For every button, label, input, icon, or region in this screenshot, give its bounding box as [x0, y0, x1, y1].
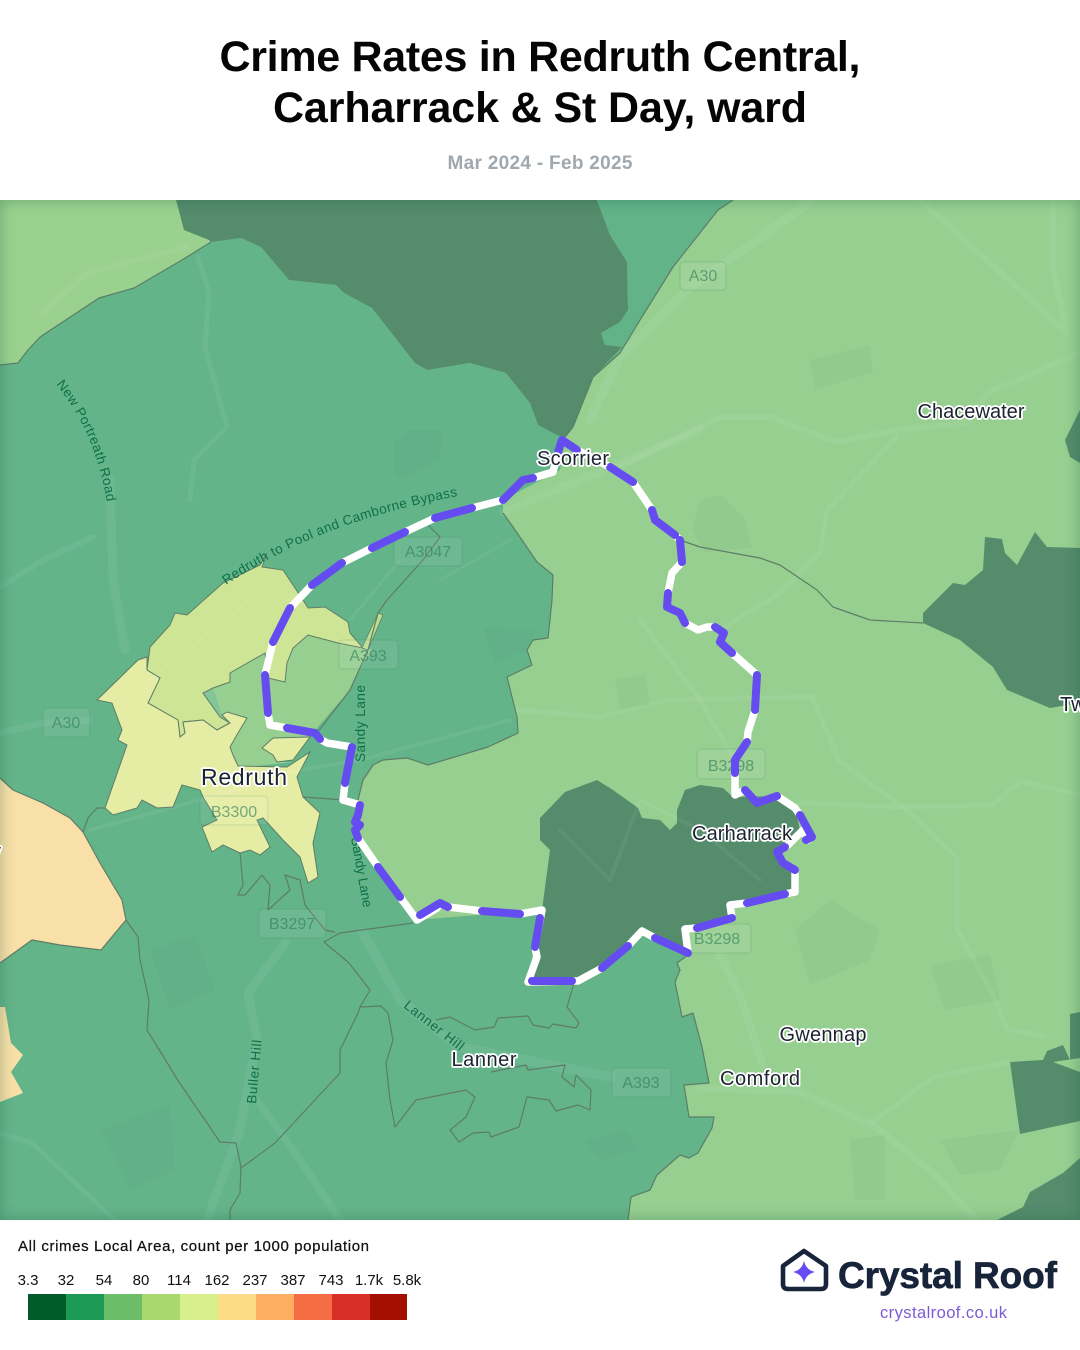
road label A30 north: [680, 262, 726, 290]
region: north-west light area: [0, 200, 211, 365]
region: Carharrack dark area: [528, 780, 800, 982]
legend values: 1.7k: [355, 1272, 384, 1289]
legend values: 3.3: [18, 1272, 38, 1289]
road label A393 south: [612, 1068, 671, 1097]
road label B3298 south: B3298: [694, 931, 740, 948]
road label B3300: B3300: [211, 804, 257, 821]
region: Redruth light green: [203, 635, 373, 768]
region: Redruth sliver: [204, 688, 226, 720]
road label A393 south: A393: [622, 1075, 660, 1092]
street labels: Sandy Lane: [348, 836, 375, 908]
region: west and south mid-green area: [0, 238, 714, 1220]
title: Carharrack & St Day, ward: [273, 84, 807, 132]
road label A30 north: A30: [689, 268, 717, 285]
street labels: New Portreath Road: [56, 380, 116, 501]
region: Redruth north yellow-green: [147, 553, 363, 737]
road label A393 west: [339, 640, 398, 669]
legend values: 162: [204, 1272, 230, 1289]
street labels: Buller Hill: [244, 1039, 265, 1104]
place label Comford: Comford: [720, 1068, 800, 1090]
place label Redruth: Redruth: [201, 764, 287, 790]
legend: [18, 1238, 422, 1320]
website url: crystalroof.co.uk: [880, 1304, 1008, 1322]
region: A393 sliver: [362, 613, 383, 650]
map panel: [0, 200, 1080, 1220]
road label B3300: [200, 796, 268, 825]
brand name: Crystal Roof: [838, 1255, 1058, 1296]
area boundaries: [0, 200, 923, 1220]
road label A393 west: A393: [349, 648, 387, 665]
road label B3297: [259, 909, 326, 938]
place label Scorrier: Scorrier: [537, 448, 609, 470]
region: Redruth yellow: [97, 657, 320, 883]
legend values: 54: [96, 1272, 112, 1289]
road label A3047: [394, 537, 462, 566]
legend values: [18, 1272, 422, 1289]
street labels: Sandy Lane: [353, 685, 368, 762]
place label Carharrack: Carharrack: [692, 823, 793, 845]
road label A30 west: A30: [52, 715, 80, 732]
local roads: [558, 426, 1012, 1124]
legend values: 743: [318, 1272, 344, 1289]
road label B3298 north: [697, 749, 765, 779]
vignette: [0, 194, 1080, 1226]
icon: house with star: [783, 1251, 826, 1289]
place label Chacewater: Chacewater: [918, 401, 1025, 423]
region: east dark patch: [923, 532, 1080, 708]
legend values: 80: [133, 1272, 149, 1289]
region: north dark area: [176, 200, 628, 437]
region: south-west peach area: [0, 778, 126, 963]
title: Crime Rates in Redruth Central,: [220, 33, 860, 81]
road label B3298 north: B3298: [708, 758, 754, 775]
road label B3298 south: [683, 924, 751, 953]
road label A3047: A3047: [405, 544, 451, 561]
legend colour scale: [28, 1294, 407, 1320]
legend values: 32: [58, 1272, 74, 1289]
logo: [783, 1251, 1058, 1322]
ward boundary: [265, 440, 812, 982]
street labels: Redruth to Pool and Camborne Bypass: [222, 489, 457, 584]
region: far east dark patches: [997, 410, 1080, 1220]
boundary purple dashes: [265, 440, 812, 981]
legend values: 237: [242, 1272, 268, 1289]
place label Gwennap: Gwennap: [780, 1024, 866, 1046]
legend title: All crimes Local Area, count per 1000 population: [18, 1238, 369, 1255]
street labels: Lanner Hill: [401, 998, 467, 1054]
place label Lanner: Lanner: [452, 1049, 517, 1071]
legend values: 5.8k: [393, 1272, 422, 1289]
street labels: [56, 380, 476, 1103]
woodland patches: [100, 345, 1020, 1200]
legend values: 387: [280, 1272, 306, 1289]
region: north teal area: [593, 200, 733, 377]
road label A30 west: [43, 708, 90, 737]
legend values: 114: [167, 1272, 191, 1289]
road label B3297: B3297: [269, 916, 315, 933]
boundary white base: [265, 440, 812, 982]
title: [220, 33, 860, 132]
date range subtitle: Mar 2024 - Feb 2025: [448, 153, 633, 174]
